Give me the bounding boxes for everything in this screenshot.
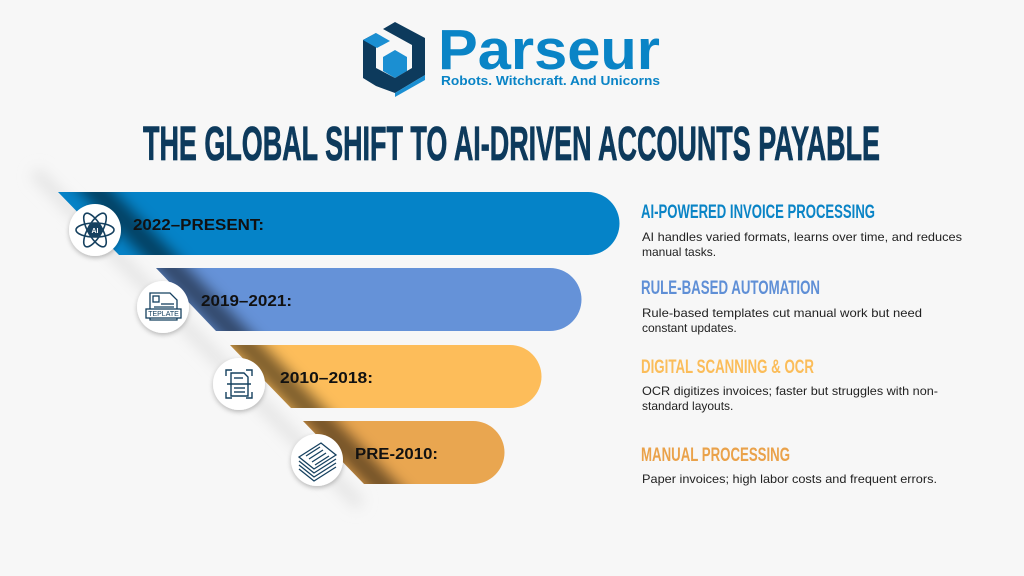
description: AI-powered: AI handles varied formats, learns over time, and reduces [642,230,962,244]
description: OCR: standard layouts. [642,399,733,413]
bar labels: 2022–PRESENT: [133,217,264,234]
description: rule-based: RULE-BASED AUTOMATION [641,278,820,299]
description: manual: MANUAL PROCESSING [641,445,790,466]
icon: AI atom: AI [92,228,99,235]
bar: 2022-present [58,192,620,255]
bar: pre-2010 [303,421,504,484]
description: rule-based: constant updates. [642,321,737,335]
tagline: Robots. Witchcraft. And Unicorns [441,73,660,88]
icon: paper stack [291,434,343,486]
bar: 2019-2021 [156,268,582,331]
icon: template document: TEPLATE [148,311,179,318]
icon: AI atom [69,204,121,256]
diagonal light band [35,172,360,505]
icon: template document [137,281,189,333]
description: AI-powered [641,202,962,259]
bar: 2010-2018 [230,345,542,408]
description: rule-based [641,278,922,335]
description: OCR: OCR digitizes invoices; faster but struggles with non- [642,384,938,398]
bar labels: 2019–2021: [201,293,292,310]
description: rule-based: Rule-based templates cut manual work but need [642,306,922,320]
bar labels: 2010–2018: [280,370,373,387]
timeline bars [58,192,620,484]
description: OCR [641,357,938,413]
description: manual [641,445,937,486]
description: OCR: DIGITAL SCANNING & OCR [641,357,814,378]
logo wordmark: Parseur [438,18,660,82]
icon: parseur hexagon [363,22,425,97]
icon: OCR scan [213,358,265,410]
description: AI-powered: manual tasks. [642,245,716,259]
description: AI-powered: AI-POWERED INVOICE PROCESSING [641,202,875,223]
description: manual: Paper invoices; high labor costs and frequent errors. [642,472,937,486]
bar labels: PRE-2010: [355,446,438,463]
bar labels [133,217,438,463]
logo [363,18,660,97]
